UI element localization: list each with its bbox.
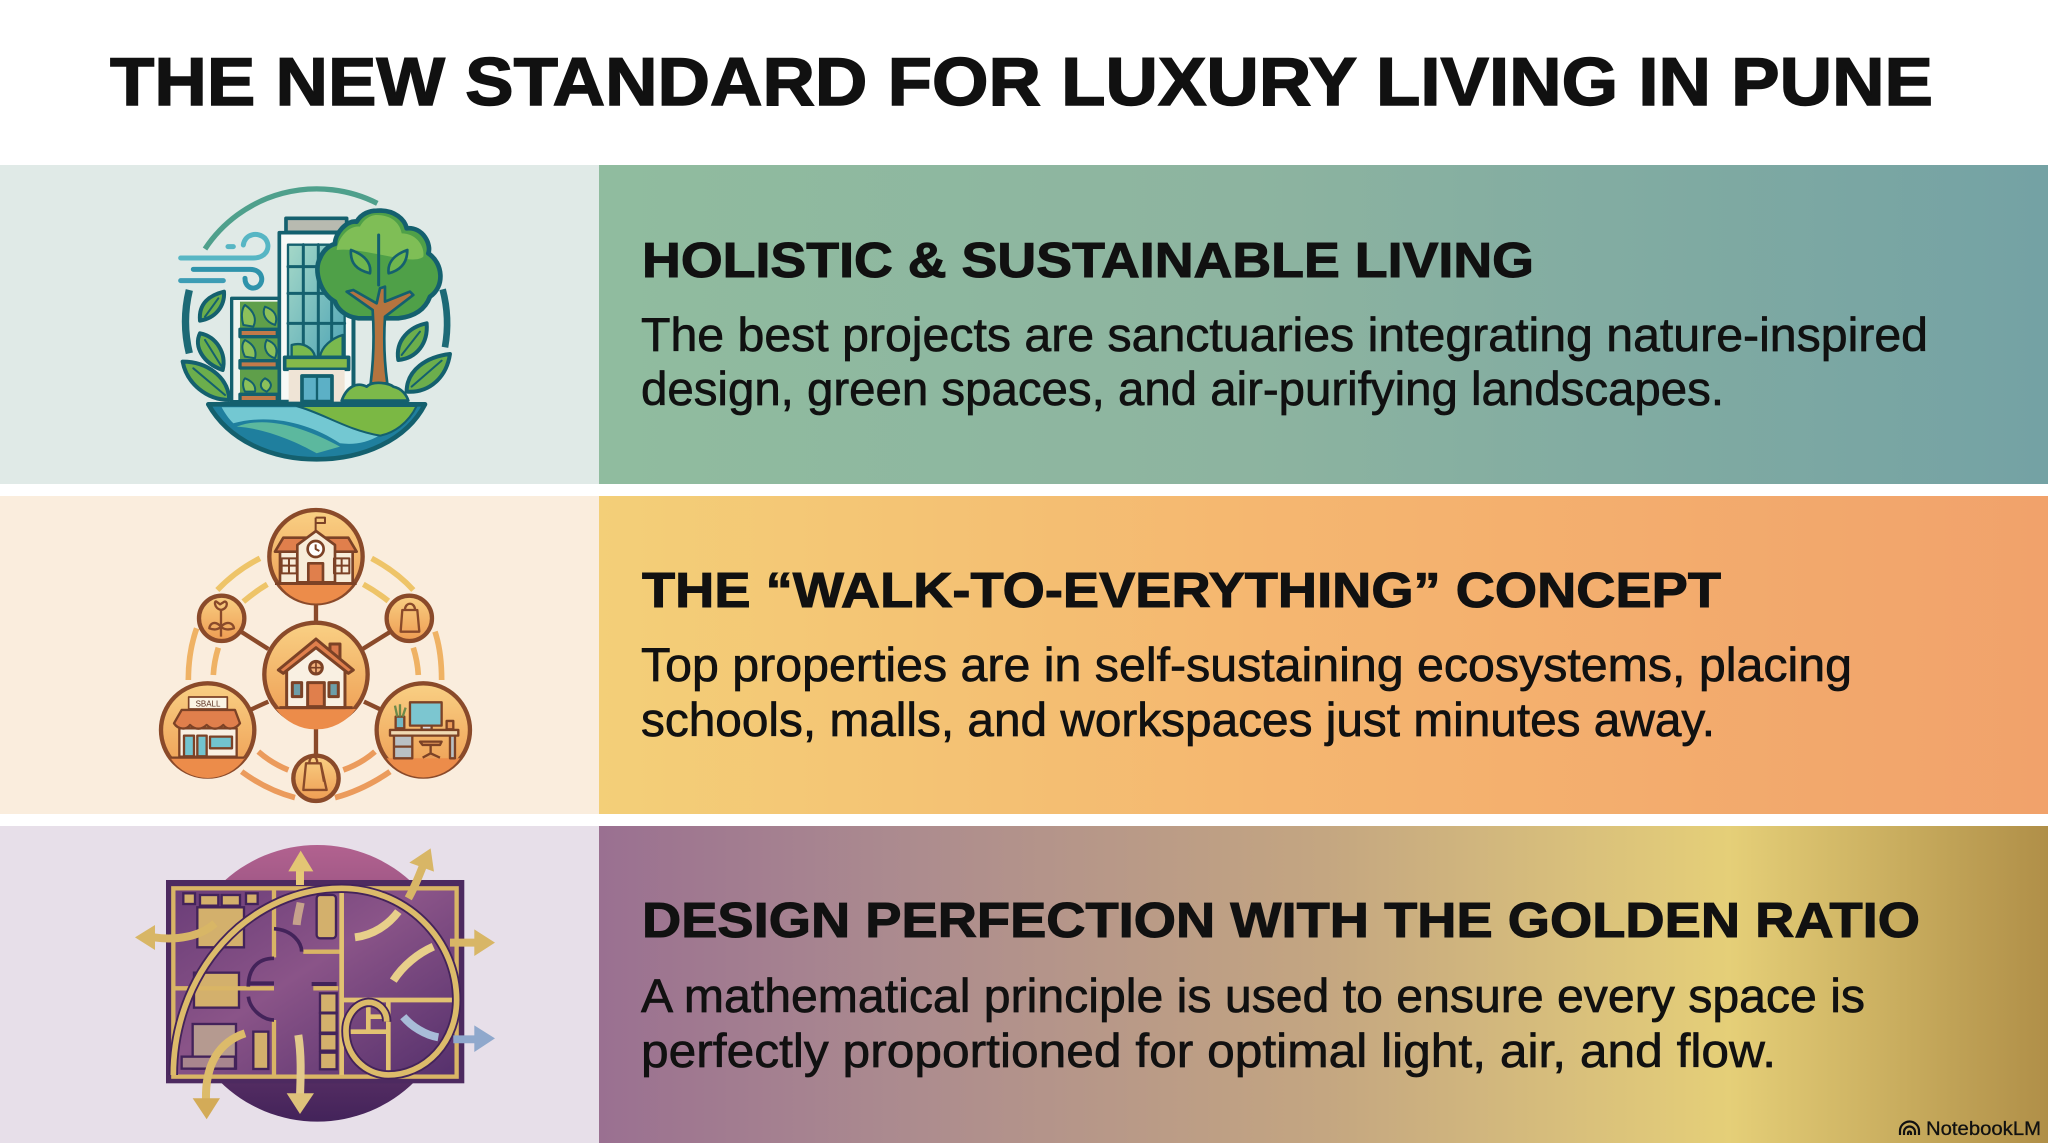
heading: holistic and sustainable living: HOLISTIC & SUSTAINABLE LIVING xyxy=(642,234,1534,288)
text: holistic and sustainable living: The best projects are sanctuaries integrating nature-inspired xyxy=(641,308,1928,361)
heading: walk-to-everything concept: THE “WALK-TO-EVERYTHING” CONCEPT xyxy=(642,564,1721,618)
school xyxy=(275,518,357,584)
heading: design perfection with the golden ratio: DESIGN PERFECTION WITH THE GOLDEN RATIO xyxy=(642,894,1920,948)
text: walk-to-everything concept: Top properties are in self-sustaining ecosystems, placing xyxy=(641,638,1852,691)
text: design perfection with the golden ratio xyxy=(641,969,1865,1077)
leaves xyxy=(183,292,450,400)
flower and bags xyxy=(209,601,419,790)
text: walk-to-everything concept xyxy=(641,638,1852,746)
icon: green building, tree and water in a ring xyxy=(181,189,450,459)
ground and water xyxy=(208,404,425,459)
logo: NotebookLM watermark: NotebookLM xyxy=(1926,1119,2041,1140)
desk xyxy=(390,702,458,758)
main tower xyxy=(279,218,354,402)
golden spiral xyxy=(173,888,457,1075)
left building xyxy=(232,298,282,402)
panel: design perfection with the golden ratio xyxy=(0,826,2048,1143)
text: design perfection with the golden ratio: perfectly proportioned for optimal light, air, and flow. xyxy=(641,1024,1776,1077)
shop: SBALL xyxy=(196,699,221,708)
title: THE NEW STANDARD FOR LUXURY LIVING IN PUNE xyxy=(110,44,1933,120)
panel: holistic and sustainable living xyxy=(0,165,2048,484)
golden squares xyxy=(342,888,455,1075)
text: holistic and sustainable living: design, green spaces, and air-purifying landscapes. xyxy=(641,362,1724,415)
icon: floor plan with golden spiral and arrows xyxy=(135,845,495,1122)
tree xyxy=(317,211,440,401)
icon: connected neighbourhood network xyxy=(161,510,470,801)
text: design perfection with the golden ratio: A mathematical principle is used to ensure every space is xyxy=(641,969,1865,1022)
flow arrows xyxy=(153,865,477,1100)
panel: walk-to-everything concept xyxy=(0,496,2048,814)
house xyxy=(278,639,353,708)
rooms and furniture xyxy=(182,893,337,1069)
shop xyxy=(171,697,244,758)
bottom bands xyxy=(171,584,460,778)
text: walk-to-everything concept: schools, malls, and workspaces just minutes away. xyxy=(641,693,1715,746)
text: holistic and sustainable living xyxy=(641,308,1928,415)
